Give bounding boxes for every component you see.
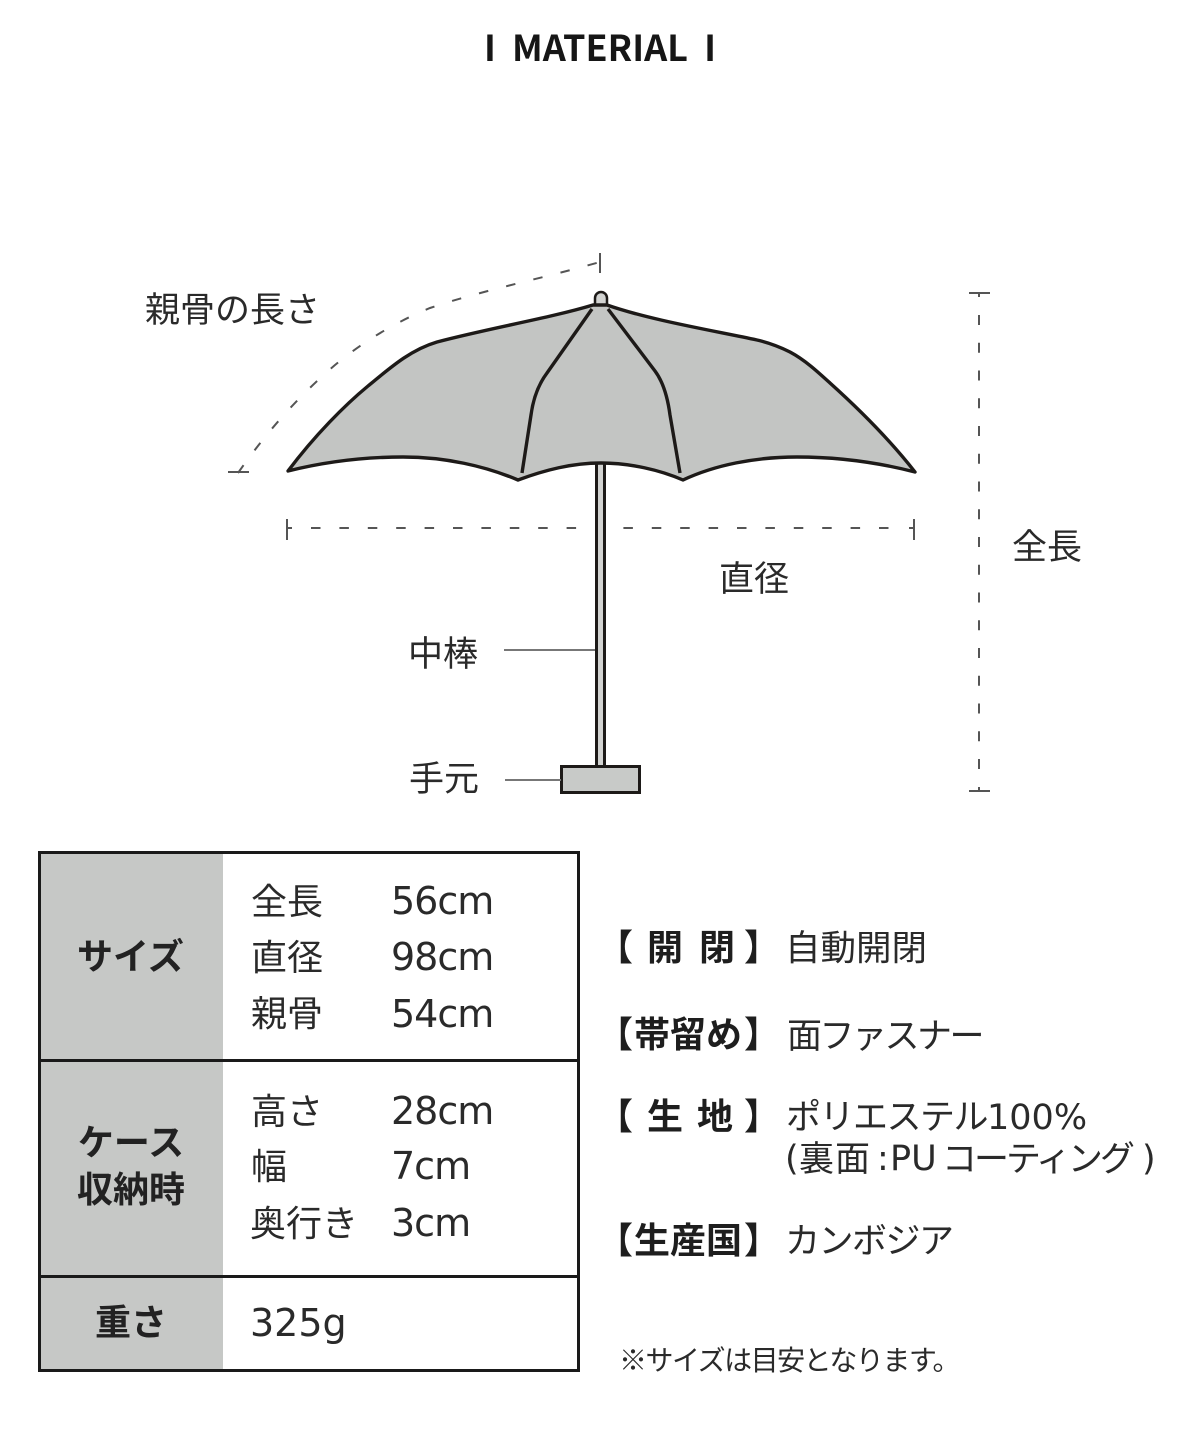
spec: fabric: コーティング	[942, 1140, 1132, 1179]
label: handle: 手元	[409, 760, 479, 799]
diameter dimension	[287, 519, 914, 540]
icon: umbrella cap	[595, 292, 607, 305]
spec: origin	[597, 1220, 953, 1261]
spec: strap: 】	[744, 1014, 780, 1055]
spec: fabric: 【	[597, 1096, 633, 1137]
weight value: 325g	[250, 1301, 347, 1345]
size values: 全長	[251, 881, 323, 922]
spec: origin: 】	[744, 1220, 780, 1261]
spec: opening	[597, 927, 927, 968]
size values: 98cm	[391, 935, 493, 979]
spec: strap: 【	[597, 1014, 633, 1055]
spec: fabric: 】	[744, 1096, 780, 1137]
spec: opening: 】	[744, 927, 780, 968]
table row headers background	[41, 854, 223, 1369]
spec: opening: 自動開閉	[785, 928, 927, 968]
spec: fabric: 生	[647, 1096, 683, 1137]
case values: 高さ	[251, 1091, 323, 1132]
spec: fabric: ポリエステル100%	[786, 1098, 1087, 1138]
size values: 親骨	[251, 993, 323, 1034]
case values: 28cm	[391, 1089, 493, 1133]
spec: opening: 【	[597, 927, 633, 968]
label: total length: 全長	[1012, 528, 1082, 567]
title: I MATERIAL I	[484, 20, 716, 72]
handle leader line	[505, 779, 561, 781]
spec: fabric: PU	[890, 1139, 937, 1179]
spec: opening: 開	[647, 927, 683, 968]
label: rib length: 親骨の長さ	[145, 291, 320, 330]
icon: umbrella shaft	[596, 463, 604, 767]
spec: fabric: :	[877, 1139, 889, 1179]
row header: stored case	[77, 1122, 185, 1210]
size values: 56cm	[391, 879, 493, 923]
spec: origin: 【	[597, 1220, 633, 1261]
spec: fabric: 裏面	[799, 1140, 871, 1179]
case values: 幅	[251, 1146, 287, 1187]
spec: fabric	[597, 1096, 1156, 1179]
size values: 直径	[251, 937, 323, 978]
shaft leader line	[504, 649, 595, 651]
case values: 奥行き	[250, 1203, 358, 1244]
case values	[250, 1089, 493, 1245]
size values	[251, 879, 493, 1036]
spec: strap: 帯留め	[634, 1014, 742, 1055]
rib length dimension	[228, 253, 600, 473]
case values: 7cm	[391, 1144, 470, 1188]
row header: stored case: ケース	[78, 1122, 184, 1163]
spec: fabric: (	[785, 1139, 799, 1179]
note: ※サイズは目安となります。	[619, 1345, 959, 1376]
spec: strap	[597, 1014, 982, 1056]
case values: 3cm	[391, 1201, 470, 1245]
umbrella diagram	[228, 253, 990, 794]
spec: strap: 面ファスナー	[787, 1017, 982, 1056]
row header: size: サイズ	[77, 936, 184, 977]
icon: umbrella handle	[562, 766, 640, 792]
label: diameter: 直径	[719, 560, 789, 599]
spec: origin: 生産国	[634, 1220, 742, 1261]
icon: umbrella canopy	[288, 305, 915, 480]
spec: fabric: )	[1142, 1139, 1156, 1179]
size values: 54cm	[391, 992, 493, 1036]
spec: fabric: 地	[697, 1096, 733, 1137]
total length dimension	[969, 293, 990, 791]
row divider two	[41, 1275, 577, 1278]
spec: origin: カンボジア	[785, 1222, 953, 1261]
row divider one	[41, 1059, 577, 1062]
spec: opening: 閉	[699, 927, 735, 968]
label: shaft: 中棒	[408, 635, 478, 674]
size table	[38, 851, 580, 1372]
row header: weight: 重さ	[95, 1302, 167, 1343]
row header: stored case: 収納時	[77, 1169, 185, 1210]
